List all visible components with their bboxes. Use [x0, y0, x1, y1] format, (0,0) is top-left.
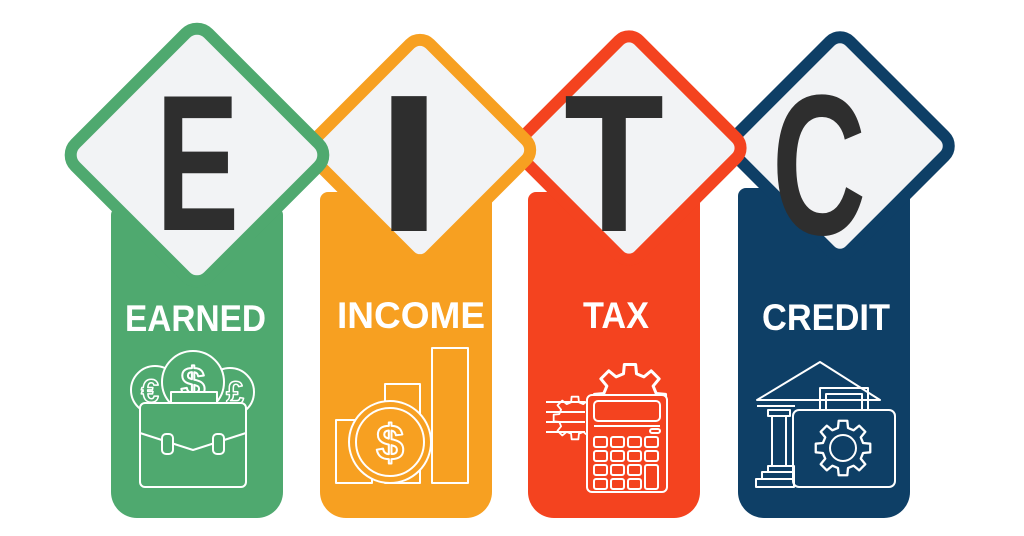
icon: briefcase with coins [131, 351, 254, 487]
letter I: I [375, 54, 443, 273]
icon: briefcase with coins: € [141, 373, 159, 409]
icon: briefcase with coins: $ [181, 359, 205, 408]
letter E: E [156, 55, 239, 272]
icon: bank and briefcase with gear [756, 362, 895, 487]
icon: bar chart with dollar coin: $ [376, 415, 404, 471]
icon: calculator with gears [546, 364, 667, 492]
panel: tax [512, 31, 746, 518]
panel: income [304, 34, 536, 518]
panel: earned [64, 22, 330, 518]
label TAX: TAX [583, 295, 649, 336]
icon: bar chart with dollar coin [336, 348, 468, 483]
panel: credit [725, 31, 955, 518]
label EARNED: EARNED [125, 298, 266, 339]
label INCOME: INCOME [337, 295, 485, 336]
label CREDIT: CREDIT [762, 297, 890, 338]
letter C: C [772, 54, 866, 277]
icon: briefcase with coins: £ [226, 375, 244, 411]
letter T: T [564, 54, 664, 273]
